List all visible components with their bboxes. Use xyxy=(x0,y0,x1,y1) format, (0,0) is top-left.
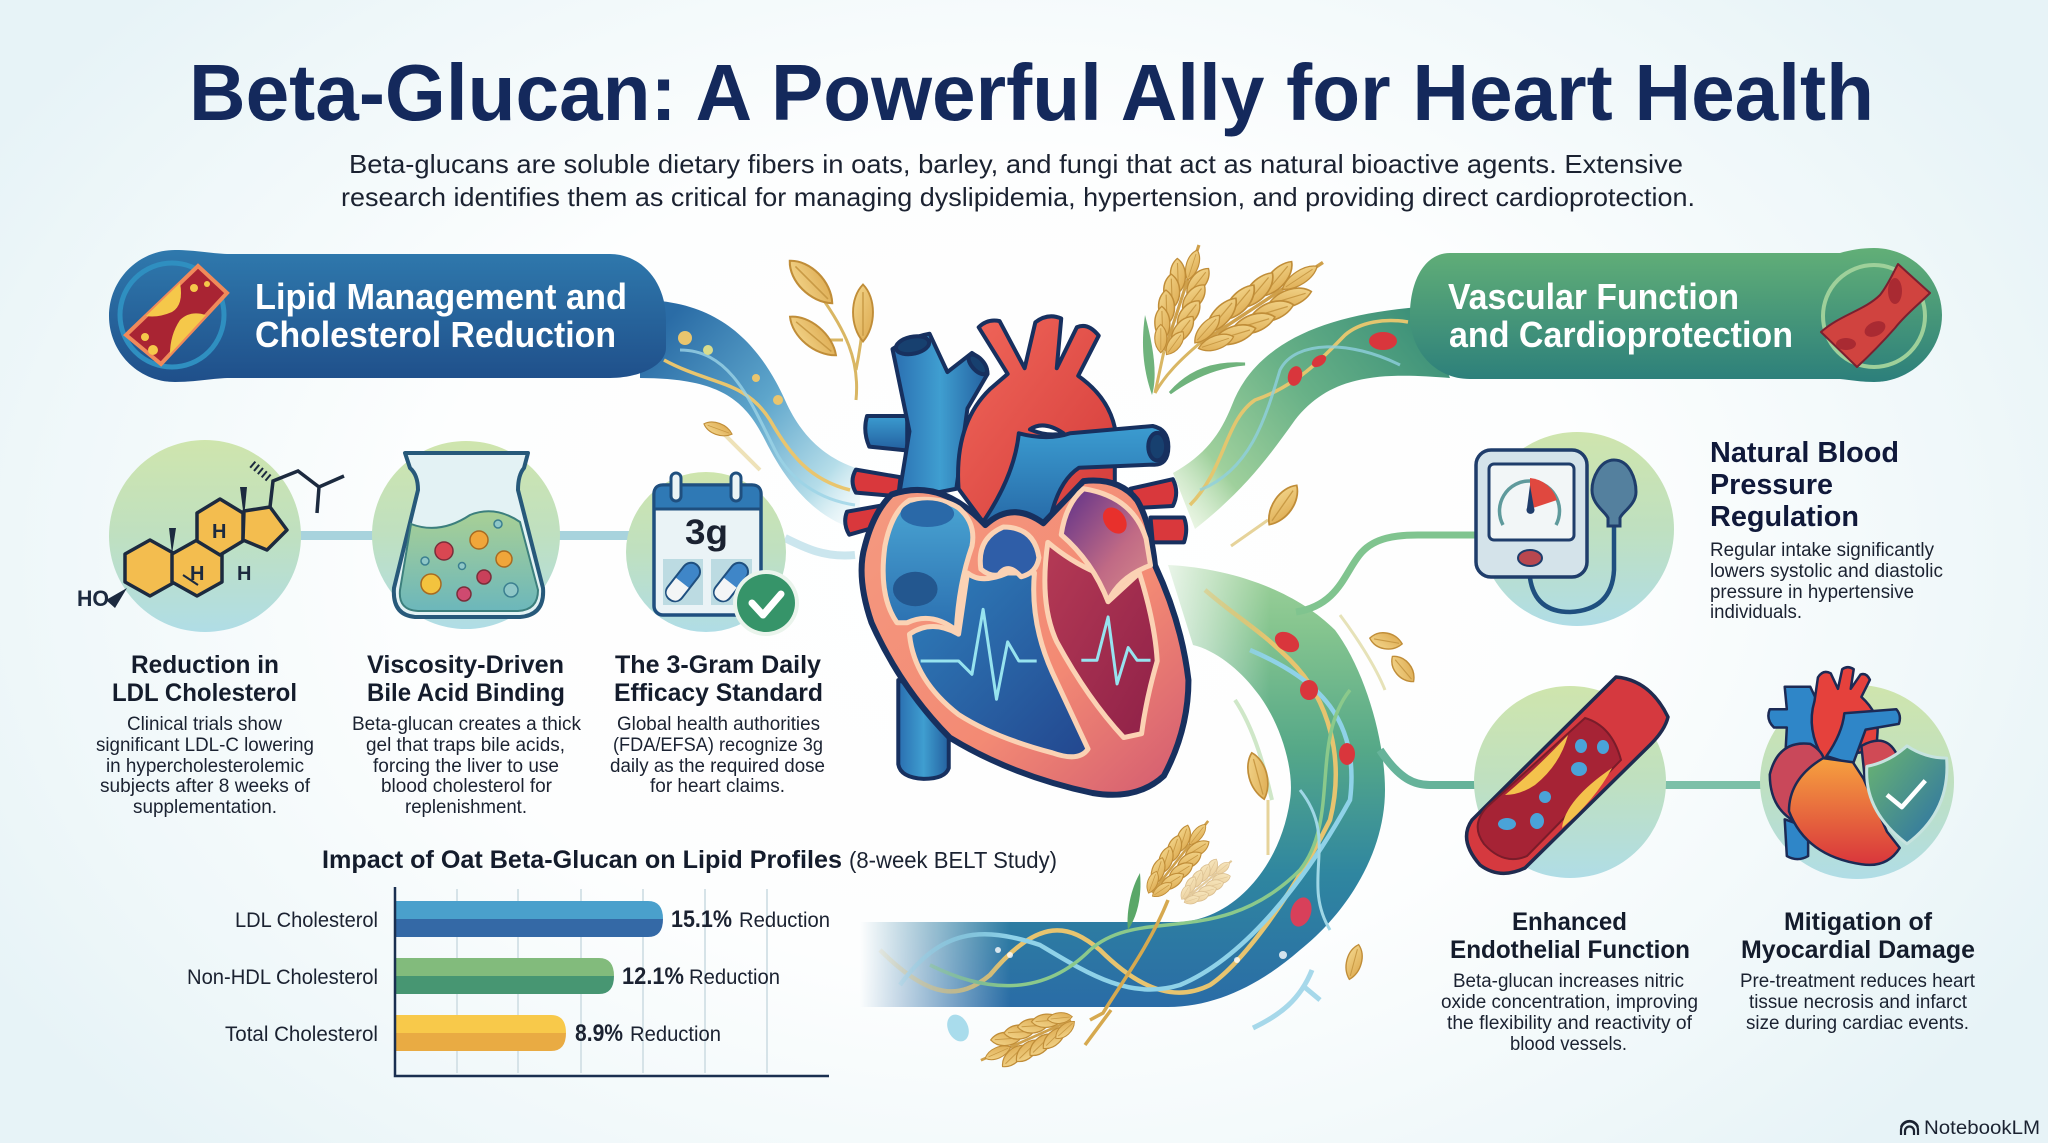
wheat: upper right ears xyxy=(1139,237,1338,395)
panel: endothelial function xyxy=(1441,677,1698,1055)
body text: significant LDL-C lowering xyxy=(96,735,314,756)
banner label: Vascular Function xyxy=(1448,276,1739,317)
connector: blood pressure xyxy=(1296,535,1482,612)
heart muscle xyxy=(862,481,1188,795)
body text: pressure in hypertensive xyxy=(1710,582,1914,603)
body text xyxy=(1740,971,1976,1034)
title: Beta-Glucan: A Powerful Ally for Heart Health xyxy=(189,48,1874,137)
heading: Bile Acid Binding xyxy=(367,679,565,707)
wheat: seeds right of heart xyxy=(1231,480,1420,855)
chart title: Impact of Oat Beta-Glucan on Lipid Profiles xyxy=(322,846,842,874)
bar: non-HDL: 12.1% xyxy=(622,963,684,990)
body text xyxy=(352,714,581,818)
right ventricle xyxy=(909,573,1088,757)
heading: Natural Blood xyxy=(1710,437,1899,469)
icon circle: cholesterol molecule: H xyxy=(237,563,251,585)
intro text xyxy=(341,149,1695,212)
connector: LDL to bile xyxy=(296,531,376,540)
icon circle: blood pressure monitor xyxy=(1476,432,1674,626)
heading xyxy=(1450,908,1690,964)
body text: oxide concentration, improving xyxy=(1441,992,1698,1013)
aorta xyxy=(958,316,1115,525)
heading: The 3-Gram Daily xyxy=(615,651,821,679)
bar: non-HDL xyxy=(187,958,780,994)
heading: Mitigation of xyxy=(1784,908,1933,936)
heading: Efficacy Standard xyxy=(614,679,823,707)
bar: total xyxy=(225,1015,721,1051)
bar: LDL xyxy=(235,901,830,937)
left ventricle xyxy=(1045,542,1157,738)
heading xyxy=(1741,908,1975,964)
connector: endothelial xyxy=(1380,750,1476,785)
pulmonary artery xyxy=(981,426,1168,546)
icon circle: heart with shield xyxy=(1760,667,1954,879)
body text: subjects after 8 weeks of xyxy=(100,776,311,797)
body text: in hypercholesterolemic xyxy=(106,756,304,777)
right atrium xyxy=(883,499,973,630)
bar chart: lipid profiles xyxy=(187,846,1057,1076)
body text: Beta-glucan creates a thick xyxy=(352,714,581,735)
body text xyxy=(1710,540,1943,623)
inferior vena cava xyxy=(898,680,949,779)
body text: daily as the required dose xyxy=(610,756,825,777)
body text: Regular intake significantly xyxy=(1710,540,1934,561)
icon: blood vessel xyxy=(1821,264,1930,367)
central heart illustration xyxy=(845,316,1188,795)
chart title: (8-week BELT Study) xyxy=(849,847,1057,873)
panel: blood pressure regulation xyxy=(1476,432,1943,626)
body text: individuals. xyxy=(1710,602,1802,623)
heading: Regulation xyxy=(1710,501,1859,533)
intro text: research identifies them as critical for managing dyslipidemia, hypertension, and providing direct cardioprotection. xyxy=(341,182,1695,212)
body text: size during cardiac events. xyxy=(1746,1013,1969,1034)
body text: (FDA/EFSA) recognize 3g xyxy=(613,735,823,756)
body text: supplementation. xyxy=(133,797,277,818)
body text: forcing the liver to use xyxy=(373,756,559,777)
icon circle: calendar with check: 3g xyxy=(685,513,728,552)
body text xyxy=(610,714,825,797)
vena cava and veins xyxy=(865,333,991,500)
body text: blood cholesterol for xyxy=(381,776,553,797)
panel: reduction in LDL cholesterol xyxy=(77,440,344,818)
wheat: seed left xyxy=(702,418,760,470)
body text xyxy=(1441,971,1698,1055)
left atrium xyxy=(1061,489,1151,602)
banner label: Lipid Management and xyxy=(255,276,627,317)
connector: 3g to heart xyxy=(785,538,855,556)
banner label: and Cardioprotection xyxy=(1449,314,1793,355)
banner label: Cholesterol Reduction xyxy=(255,314,616,355)
heading: Myocardial Damage xyxy=(1741,936,1975,964)
icon circle: open artery xyxy=(1467,677,1668,878)
wheat: lower ears xyxy=(943,808,1366,1080)
wheat: upper left sprig xyxy=(782,253,873,400)
pulmonary valve xyxy=(980,527,1039,577)
body text: blood vessels. xyxy=(1510,1034,1627,1055)
body text: for heart claims. xyxy=(650,776,785,797)
panel: 3-gram daily standard xyxy=(610,472,825,797)
heading xyxy=(367,651,565,707)
body text: gel that traps bile acids, xyxy=(366,735,565,756)
heading xyxy=(112,651,297,707)
ribbon: vascular banner to heart xyxy=(1173,307,1450,529)
panel: myocardial damage xyxy=(1740,667,1976,1034)
connector: bile to 3g xyxy=(556,531,631,540)
NotebookLM mark: NotebookLM xyxy=(1924,1118,2040,1139)
bar: total: 8.9% xyxy=(575,1020,623,1047)
pulmonary veins xyxy=(845,470,1186,542)
heading xyxy=(1710,437,1899,533)
body text: Pre-treatment reduces heart xyxy=(1740,971,1976,992)
panel: bile acid binding xyxy=(352,441,581,818)
body text: Global health authorities xyxy=(617,714,820,735)
heading: Endothelial Function xyxy=(1450,936,1690,964)
icon circle: beaker xyxy=(372,441,560,629)
bar: LDL: 15.1% xyxy=(671,906,732,933)
ECG traces xyxy=(921,609,1151,699)
bar: LDL: LDL Cholesterol xyxy=(235,909,378,932)
icon circle: cholesterol molecule: HO xyxy=(77,586,109,611)
body text: the flexibility and reactivity of xyxy=(1447,1013,1693,1034)
body text xyxy=(96,714,314,818)
heading: Enhanced xyxy=(1512,908,1627,936)
banner label xyxy=(1448,276,1793,355)
bar: total: Total Cholesterol xyxy=(225,1023,378,1046)
icon circle: cholesterol molecule: H xyxy=(190,563,204,585)
icon circle: calendar with check xyxy=(626,472,799,636)
body text: Beta-glucan increases nitric xyxy=(1453,971,1684,992)
ribbon: lipid banner to heart xyxy=(640,300,862,530)
body text: replenishment. xyxy=(405,797,527,818)
bar: total: Reduction xyxy=(630,1023,721,1046)
heading xyxy=(614,651,823,707)
body text: tissue necrosis and infarct xyxy=(1749,992,1968,1013)
icon: clogged artery xyxy=(120,263,227,367)
banner label xyxy=(255,276,627,355)
right banner xyxy=(1410,248,1942,382)
heading: Pressure xyxy=(1710,469,1833,501)
bar: non-HDL: Reduction xyxy=(689,966,780,989)
ribbon: heart to lower panels xyxy=(860,565,1385,1007)
body text: lowers systolic and diastolic xyxy=(1710,561,1943,582)
icon circle: cholesterol molecule xyxy=(77,440,344,632)
bar: LDL: Reduction xyxy=(739,909,830,932)
connector: endothelial to myocardial xyxy=(1660,781,1765,789)
body text: Clinical trials show xyxy=(127,714,282,735)
aortic arch opening xyxy=(1030,425,1063,435)
left banner xyxy=(109,250,666,382)
heading: LDL Cholesterol xyxy=(112,679,297,707)
intro text: Beta-glucans are soluble dietary fibers in oats, barley, and fungi that act as natural bioactive agents. Extensive xyxy=(349,149,1683,179)
heading: Viscosity-Driven xyxy=(367,651,564,679)
heading: Reduction in xyxy=(131,651,279,679)
icon circle: cholesterol molecule: H xyxy=(212,521,226,543)
bar: non-HDL: Non-HDL Cholesterol xyxy=(187,966,378,989)
